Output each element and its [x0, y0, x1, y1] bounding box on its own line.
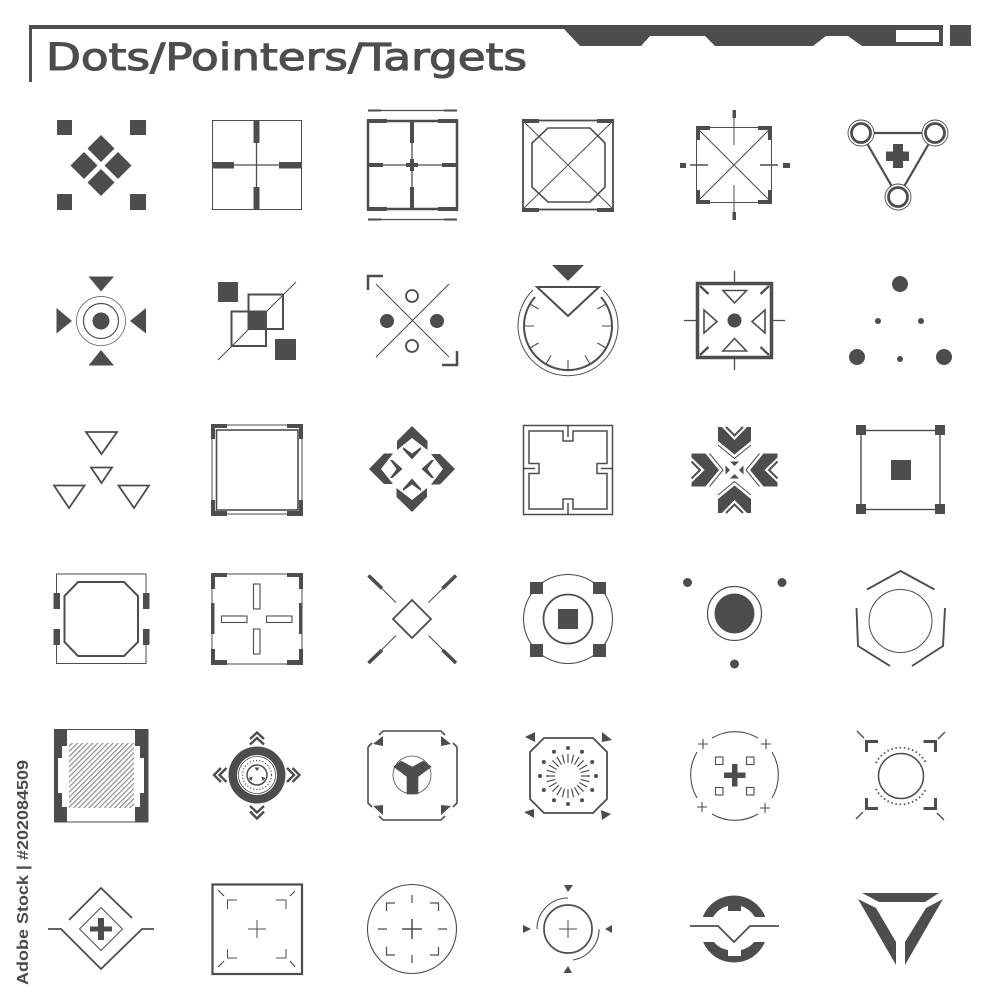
icon: nested diamond with wave line	[48, 888, 154, 969]
icon: ring dial with chevrons	[214, 732, 300, 818]
icon: circle with swirl arcs and triangles	[523, 885, 612, 973]
icon: double frame square	[211, 424, 303, 516]
icon: reticle with X and ticks	[680, 110, 790, 220]
icon: four inward double chevrons	[692, 427, 778, 513]
header frame	[29, 25, 971, 82]
icon: heavy square with inward triangles	[684, 271, 785, 370]
icon: circle arcs with plus marks	[691, 732, 778, 820]
title: Dots/Pointers/Targets	[46, 36, 527, 79]
icon: octagon with side tabs	[54, 574, 150, 664]
icon: concentric target with four triangles	[56, 276, 146, 366]
icon: notched double square	[523, 425, 613, 515]
icon: framed square with thin crosshair	[212, 884, 302, 974]
icon: four diamonds with corner squares	[57, 120, 146, 210]
icon: overlapping squares with diagonal	[218, 282, 296, 360]
icon: circle target with square nodes	[524, 574, 612, 664]
icon: circle with ticks and brackets	[368, 884, 456, 974]
icon: four outlined triangles	[54, 432, 149, 508]
icon: square with corner nodes	[856, 425, 945, 514]
icon: triangle of rings with cross	[848, 120, 948, 210]
icon: octagon with radial burst	[524, 732, 612, 820]
icon: octagon with Y shape	[368, 731, 457, 820]
icon: four chevron diamond	[369, 426, 455, 512]
icon: hexagon with circle	[856, 571, 945, 666]
icon: square with crosshair bars	[212, 120, 302, 210]
icon: frame with four slots	[211, 573, 303, 665]
side credit text: Adobe Stock | #202084509	[15, 760, 32, 985]
icon: ringed dot with three satellites	[683, 578, 786, 668]
icon: triangle of dots	[849, 276, 952, 365]
icon: three-part triangle	[858, 893, 943, 965]
icon: square with X and octagon	[522, 119, 614, 212]
icon: hatched square	[54, 729, 148, 822]
icon: split circle with V line	[690, 895, 779, 963]
icon: dial with triangle pointer	[518, 265, 618, 376]
icon: heavy square with crosshair and rails	[367, 110, 458, 220]
icon: X with dots and brackets	[368, 276, 457, 365]
icon: diamond with diagonal bars	[368, 576, 456, 663]
icon: dotted circle with brackets	[856, 731, 945, 820]
